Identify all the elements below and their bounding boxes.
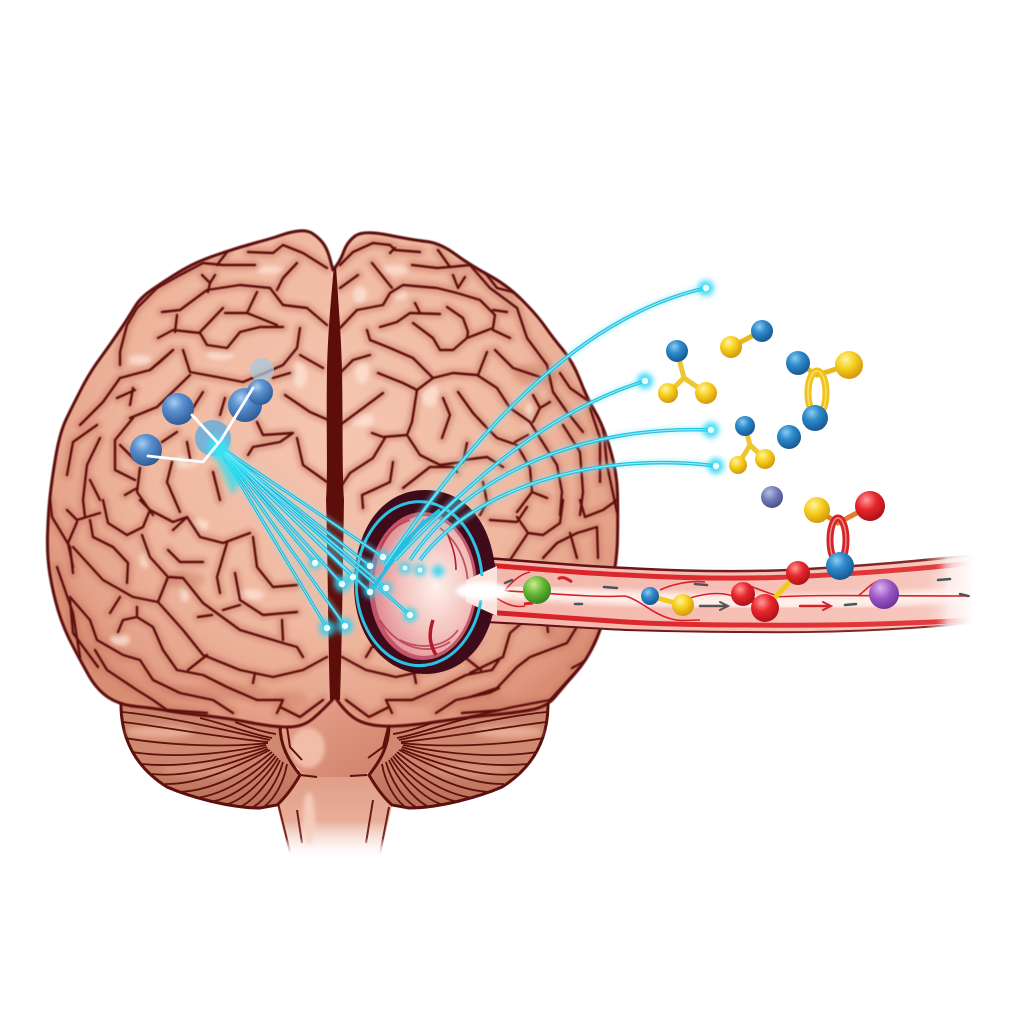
gyri highlights [110,265,535,646]
cyan ring [356,502,482,666]
darker rim folds [160,363,580,709]
lesion capsule [354,490,518,674]
flow arrows and dashes [505,579,968,610]
cerebellum: right lobe [369,690,548,808]
vessel fade at right end [945,545,985,640]
molecule: group 3 with ring [786,351,863,431]
sulci lines [50,243,619,717]
molecule: group 4 [729,416,801,474]
vessel inner capillaries [490,572,970,620]
sulcus shading [50,243,619,717]
vessel molecules [523,561,899,622]
blood vessel [485,545,985,640]
source molecule cluster [130,358,274,495]
molecule: group 2 [720,320,773,358]
cerebellum: left lobe [121,690,300,808]
vessel mouth opening [466,566,497,616]
brainstem [277,700,392,860]
neural fibres: fan from source [217,445,410,628]
molecule: group 1 [658,340,717,404]
neural fibres: long curved to right [372,288,716,590]
cerebrum [47,231,619,727]
molecule: red ring group [804,491,885,580]
glowing nodes [309,280,724,636]
molecule: purple atom [761,486,783,508]
central fissure [326,265,344,700]
